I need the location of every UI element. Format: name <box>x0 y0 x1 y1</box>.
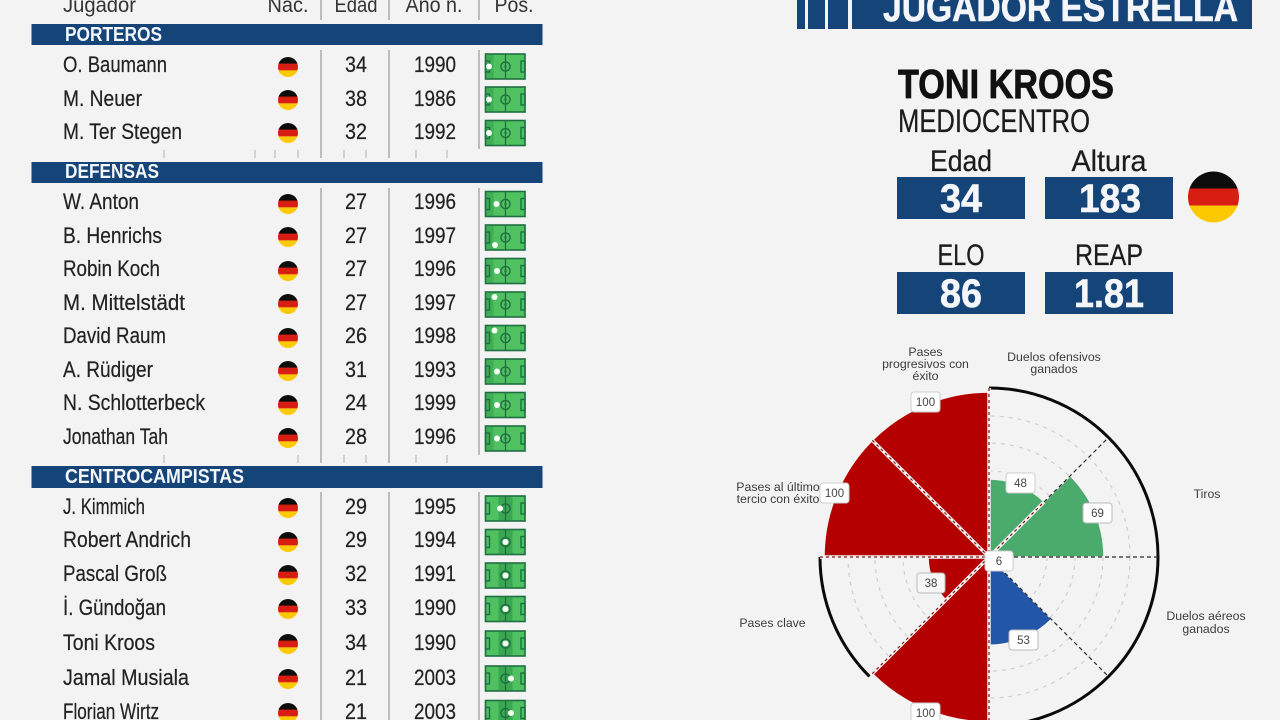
axis label: duelos aereos: ganados <box>1182 622 1230 636</box>
player row: David Raum <box>63 323 525 350</box>
player row: Robert Andrich <box>63 527 525 554</box>
value label: 53 <box>1009 630 1038 650</box>
value label: 69 <box>1083 503 1112 523</box>
sector: pases clave 38 <box>928 557 989 600</box>
axis label: pases progresivos: Pases <box>908 345 943 359</box>
radar chart <box>820 388 1158 720</box>
player row: Robert Andrich: 1994 <box>414 527 456 552</box>
player row: İ. Gündoğan: 1990 <box>414 595 456 620</box>
player row: Jonathan Tah: 28 <box>345 424 367 449</box>
player row: Jonathan Tah: Jonathan Tah <box>63 424 168 449</box>
player name: TONI KROOS <box>898 61 1114 107</box>
stat: altura <box>1045 145 1173 221</box>
player row: O. Baumann: 1990 <box>414 52 456 77</box>
stat: elo: ELO <box>938 239 984 272</box>
player row: Jamal Musiala <box>63 665 525 691</box>
player row: M. Ter Stegen: M. Ter Stegen <box>63 119 182 144</box>
value label: 6: 6 <box>996 556 1002 568</box>
player row: B. Henrichs: 1997 <box>414 223 456 248</box>
player row: J. Kimmich: J. Kimmich <box>63 494 145 519</box>
section band: porteros <box>32 24 542 46</box>
player row: Jamal Musiala: 2003 <box>414 665 456 690</box>
player row: Robin Koch <box>63 256 525 284</box>
player row: J. Kimmich: 1995 <box>414 494 456 519</box>
player row: A. Rüdiger <box>63 357 525 384</box>
sector: tiros 69 <box>989 476 1104 557</box>
player row: M. Ter Stegen: 32 <box>345 119 367 144</box>
section band: centrocampistas <box>32 466 542 488</box>
player row: N. Schlotterbeck: 24 <box>345 390 367 415</box>
stat: reap <box>1045 239 1173 316</box>
player row: W. Anton <box>63 189 525 216</box>
player row: M. Mittelstädt <box>63 290 525 317</box>
player row: Jamal Musiala: 21 <box>345 665 367 690</box>
player row: W. Anton: 27 <box>345 189 367 214</box>
player row: İ. Gündoğan: İ. Gündoğan <box>63 595 166 620</box>
axis label: duelos aereos: Duelos aéreos <box>1166 609 1246 623</box>
axis label: pases al ultimo tercio: tercio con éxito <box>737 492 820 506</box>
sector: pases al ultimo tercio 100 <box>824 440 989 557</box>
player row: O. Baumann: O. Baumann <box>63 52 167 77</box>
player row: M. Ter Stegen <box>63 119 525 146</box>
axis label: duelos ofensivos: Duelos ofensivos <box>1007 350 1101 364</box>
player row: B. Henrichs: B. Henrichs <box>63 223 162 248</box>
player row: M. Neuer: 38 <box>345 86 367 111</box>
player row: W. Anton: 1996 <box>414 189 456 214</box>
player position: MEDIOCENTRO <box>898 103 1090 139</box>
player row: O. Baumann <box>63 52 525 79</box>
player row: David Raum: 1998 <box>414 323 456 348</box>
player row: Robin Koch: 27 <box>345 256 367 281</box>
player row: İ. Gündoğan: 33 <box>345 595 367 620</box>
stat: edad: 34 <box>940 177 983 221</box>
axis label: pases progresivos: éxito <box>913 369 939 383</box>
player row: Robert Andrich: 29 <box>345 527 367 552</box>
value label: 100 ultimo tercio <box>820 483 849 503</box>
stat: elo <box>897 239 1025 316</box>
sector: pases progresivos 100 <box>872 392 989 557</box>
value label: 69: 69 <box>1091 508 1104 520</box>
player row: O. Baumann: 34 <box>345 52 367 77</box>
section band: porteros: PORTEROS <box>65 24 162 46</box>
player row: B. Henrichs <box>63 223 525 250</box>
player row: J. Kimmich: 29 <box>345 494 367 519</box>
player row: M. Neuer: M. Neuer <box>63 86 142 111</box>
player row: N. Schlotterbeck: N. Schlotterbeck <box>63 390 206 415</box>
value label: 100 bottom <box>911 703 940 720</box>
stat: altura: Altura <box>1072 145 1147 178</box>
player row: B. Henrichs: 27 <box>345 223 367 248</box>
player row: David Raum: 26 <box>345 323 367 348</box>
icon: german flag <box>1188 171 1240 224</box>
player row: Robin Koch: 1996 <box>414 256 456 281</box>
value label: 100 progresivos: 100 <box>916 397 935 409</box>
player row: Jonathan Tah: 1996 <box>414 424 456 449</box>
sector: red 180-225 <box>872 557 989 720</box>
value label: 48 <box>1006 473 1035 493</box>
value label: 6 <box>985 551 1013 571</box>
player row: İ. Gündoğan <box>63 595 525 622</box>
player row: Toni Kroos: 1990 <box>414 630 456 655</box>
table header <box>63 0 534 17</box>
axis label: pases progresivos: progresivos con <box>882 357 969 371</box>
player row: Pascal Groß: 1991 <box>414 561 456 586</box>
player row: W. Anton: W. Anton <box>63 189 139 214</box>
sector: duelos aereos 53 <box>989 557 1051 645</box>
player row: M. Ter Stegen: 1992 <box>414 119 456 144</box>
section band: defensas <box>32 161 542 183</box>
player row: David Raum: David Raum <box>63 323 166 348</box>
player row: M. Mittelstädt: M. Mittelstädt <box>63 290 185 315</box>
axis label: pases clave: Pases clave <box>739 616 806 630</box>
stat: reap: 1.81 <box>1074 272 1144 316</box>
player row: M. Neuer <box>63 86 525 112</box>
value label: 38 <box>917 573 945 593</box>
player row: M. Mittelstädt: 27 <box>345 290 367 315</box>
player row: Toni Kroos: Toni Kroos <box>63 630 155 655</box>
player row: J. Kimmich <box>63 494 525 521</box>
section band: centrocampistas: CENTROCAMPISTAS <box>65 466 244 488</box>
player row: M. Neuer: 1986 <box>414 86 456 111</box>
stat: reap: REAP <box>1075 239 1143 272</box>
player row: Pascal Groß: Pascal Groß <box>63 561 167 586</box>
player row: Jonathan Tah <box>63 424 525 451</box>
stat: altura: 183 <box>1079 177 1141 221</box>
player row: N. Schlotterbeck: 1999 <box>414 390 456 415</box>
player row: Toni Kroos: 34 <box>345 630 367 655</box>
value label: 48: 48 <box>1014 478 1027 490</box>
value label: 100 progresivos <box>911 392 940 412</box>
player row: Florian Wirtz <box>63 699 525 720</box>
player row: Pascal Groß: 32 <box>345 561 367 586</box>
player row: Robin Koch: Robin Koch <box>63 256 160 281</box>
player row: Jamal Musiala: Jamal Musiala <box>63 665 190 690</box>
player row: A. Rüdiger: 31 <box>345 357 367 382</box>
axis label: tiros: Tiros <box>1194 487 1220 501</box>
stat: edad <box>897 145 1025 221</box>
axis label: duelos ofensivos: ganados <box>1030 362 1078 376</box>
player row: A. Rüdiger: A. Rüdiger <box>63 357 153 382</box>
player row: Robert Andrich: Robert Andrich <box>63 527 191 552</box>
outer ring <box>820 388 1158 720</box>
player row: Pascal Groß <box>63 561 525 588</box>
value label: 100 ultimo tercio: 100 <box>825 488 844 500</box>
section band: defensas: DEFENSAS <box>65 161 159 183</box>
stat: elo: 86 <box>940 272 982 316</box>
value label: 53: 53 <box>1017 635 1030 647</box>
player row: A. Rüdiger: 1993 <box>414 357 456 382</box>
sector: duelos ofensivos 48 <box>989 479 1044 557</box>
player row: Toni Kroos <box>63 630 525 656</box>
value label: 38: 38 <box>925 578 937 590</box>
value label: 100 bottom: 100 <box>916 708 935 720</box>
stat: edad: Edad <box>930 145 992 178</box>
player row: N. Schlotterbeck <box>63 390 525 418</box>
axis label: pases al ultimo tercio: Pases al último <box>736 480 820 494</box>
player row: M. Mittelstädt: 1997 <box>414 290 456 315</box>
